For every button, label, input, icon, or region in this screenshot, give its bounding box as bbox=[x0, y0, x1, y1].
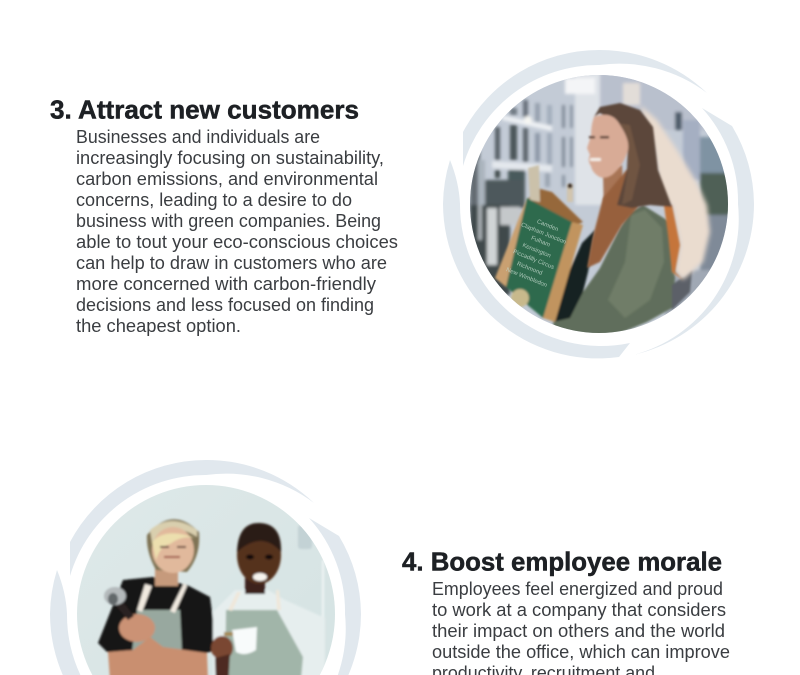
coffee tamper bbox=[116, 603, 134, 620]
section 4: boost employee morale bbox=[402, 546, 730, 675]
backlit hair glow bbox=[640, 105, 710, 280]
left barista apron bbox=[132, 610, 182, 652]
wrapped bread in bag bbox=[527, 188, 583, 226]
heading: attract new customers: 3. Attract new customers bbox=[50, 94, 359, 124]
body text: boost employee morale: to work at a company that considers bbox=[432, 600, 726, 620]
orange lower hair bbox=[587, 168, 640, 268]
left barista arms bbox=[108, 637, 208, 675]
photo: two baristas bbox=[70, 480, 345, 675]
right barista white shirt bbox=[213, 590, 325, 675]
body text: boost employee morale: Employees feel energized and proud bbox=[432, 579, 723, 599]
body text: attract new customers bbox=[76, 127, 398, 336]
icon: swirl ring around shopper photo bbox=[443, 50, 754, 358]
body text: attract new customers: Businesses and individuals are bbox=[76, 127, 320, 147]
body text: attract new customers: can help to draw in customers who are bbox=[76, 253, 387, 273]
face bbox=[587, 115, 628, 178]
bag lettering: Richmond bbox=[516, 261, 543, 277]
icon: swirl ring around baristas photo bbox=[50, 460, 361, 675]
bag lettering bbox=[505, 219, 567, 289]
body text: boost employee morale: their impact on others and the world bbox=[432, 621, 725, 641]
right barista hand and arm bbox=[211, 636, 233, 660]
right barista apron bbox=[225, 610, 303, 675]
blurred street background bbox=[470, 70, 735, 330]
photo: woman with shopping bag bbox=[465, 70, 735, 340]
bag lettering: New Wimbledon bbox=[505, 267, 548, 289]
coffee cup bbox=[232, 627, 257, 654]
neck bbox=[602, 164, 624, 202]
body text: attract new customers: decisions and less focused on finding bbox=[76, 295, 374, 315]
body text: attract new customers: able to tout your eco-conscious choices bbox=[76, 232, 398, 252]
body text: attract new customers: the cheapest option. bbox=[76, 316, 241, 336]
body text: attract new customers: concerns, leading to a desire to do bbox=[76, 190, 352, 210]
body text: attract new customers: carbon emissions, and environmental bbox=[76, 169, 378, 189]
left barista shirt bbox=[98, 577, 217, 660]
right barista head bbox=[245, 578, 265, 594]
body text: boost employee morale bbox=[432, 579, 730, 675]
bag lettering: Piccadilly Circus bbox=[512, 249, 555, 271]
bag lettering: Fulham bbox=[530, 236, 551, 249]
body text: boost employee morale: outside the office, which can improve bbox=[432, 642, 730, 662]
body text: attract new customers: business with green companies. Being bbox=[76, 211, 381, 231]
body text: attract new customers: more concerned with carbon-friendly bbox=[76, 274, 376, 294]
section 3: attract new customers bbox=[50, 94, 398, 336]
jacket bbox=[553, 205, 675, 340]
heading: boost employee morale: 4. Boost employee morale bbox=[402, 546, 722, 576]
bag lettering: Kensington bbox=[521, 243, 551, 259]
body text: attract new customers: increasingly focusing on sustainability, bbox=[76, 148, 384, 168]
dark brown hair bbox=[594, 103, 672, 208]
bag lettering: Camden bbox=[536, 219, 559, 233]
bag lettering: Clapham Junction bbox=[520, 222, 567, 246]
dark top bbox=[555, 230, 595, 322]
paper bag bbox=[495, 198, 527, 287]
left barista head bbox=[155, 566, 178, 586]
